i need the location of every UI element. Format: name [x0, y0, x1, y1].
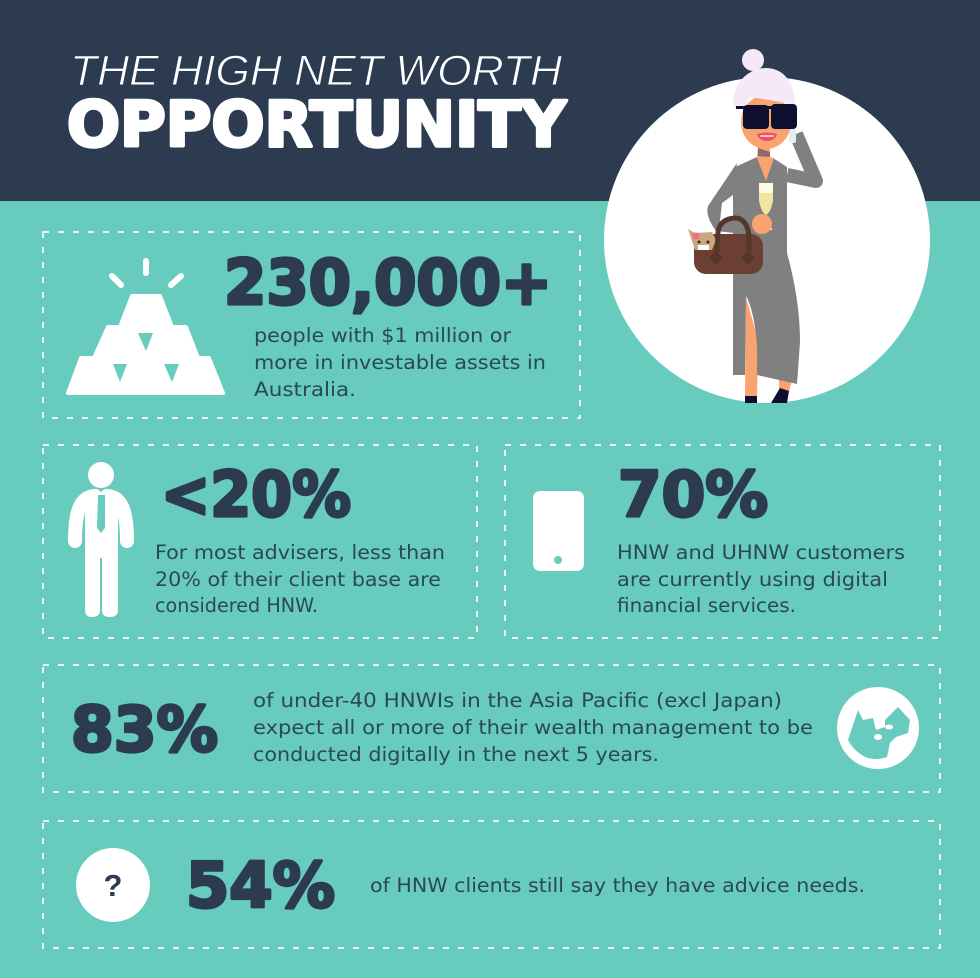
header band: [0, 0, 980, 201]
statistic: 83%: 83%: [71, 693, 218, 766]
icon: question mark: [76, 848, 150, 922]
panel: 83%: [43, 665, 940, 792]
champagne glass: [759, 183, 773, 230]
description: [155, 541, 445, 617]
title line: the high net worth: THE HIGH NET WORTH: [70, 47, 563, 95]
lower arm holding bag: [707, 163, 752, 235]
hair bun: [742, 49, 764, 71]
statistic: 230,000+: 230,000+: [224, 246, 552, 319]
title line: opportunity: OPPORTUNITY: [67, 88, 567, 161]
statistic: 54%: 54%: [186, 849, 335, 922]
white circle behind figure: [604, 77, 930, 403]
description: [254, 324, 546, 401]
icon: businessman: [75, 462, 127, 617]
icon: smartphone: [533, 491, 584, 571]
description: expect all or more of their wealth management to be: [253, 716, 813, 739]
description: 20% of their client base are: [155, 568, 441, 591]
raised arm: [787, 134, 816, 181]
description: people with $1 million or: [254, 324, 512, 347]
title: [67, 47, 567, 161]
icon: question mark: ?: [104, 868, 122, 903]
statistic: 70%: 70%: [618, 458, 768, 531]
description: financial services.: [617, 594, 796, 617]
description: [617, 541, 905, 617]
illustration: woman with champagne and handbag: [688, 49, 816, 403]
bag handles: [709, 218, 755, 265]
hair: [733, 68, 795, 108]
description: HNW and UHNW customers: [617, 541, 905, 564]
handbag: [694, 234, 763, 274]
dress: [733, 157, 800, 384]
description: considered HNW.: [155, 594, 318, 617]
description: Australia.: [254, 378, 356, 401]
description: of under-40 HNWIs in the Asia Pacific (excl Japan): [253, 689, 782, 712]
neck shadow: [758, 148, 770, 157]
hand: [752, 214, 772, 234]
panel: 54%: [43, 821, 940, 948]
panel: less than 20%: [43, 445, 477, 638]
sunglasses: [736, 104, 797, 129]
dog in bag: [688, 229, 716, 250]
description: [253, 689, 813, 766]
description: more in investable assets in: [254, 351, 546, 374]
panel: 70%: [505, 445, 940, 638]
phone: [789, 129, 796, 143]
legs and shoes: [745, 297, 792, 403]
panel: 230,000+: [43, 232, 580, 418]
neck and neckline: [757, 146, 774, 181]
description: of HNW clients still say they have advice needs.: [370, 874, 865, 897]
icon: gold bars: [68, 261, 223, 393]
description: conducted digitally in the next 5 years.: [253, 743, 659, 766]
description: For most advisers, less than: [155, 541, 445, 564]
head: [741, 95, 791, 149]
statistic: <20%: <20%: [161, 458, 351, 531]
icon: globe: [837, 687, 919, 769]
lips: [757, 132, 777, 141]
description: are currently using digital: [617, 568, 888, 591]
